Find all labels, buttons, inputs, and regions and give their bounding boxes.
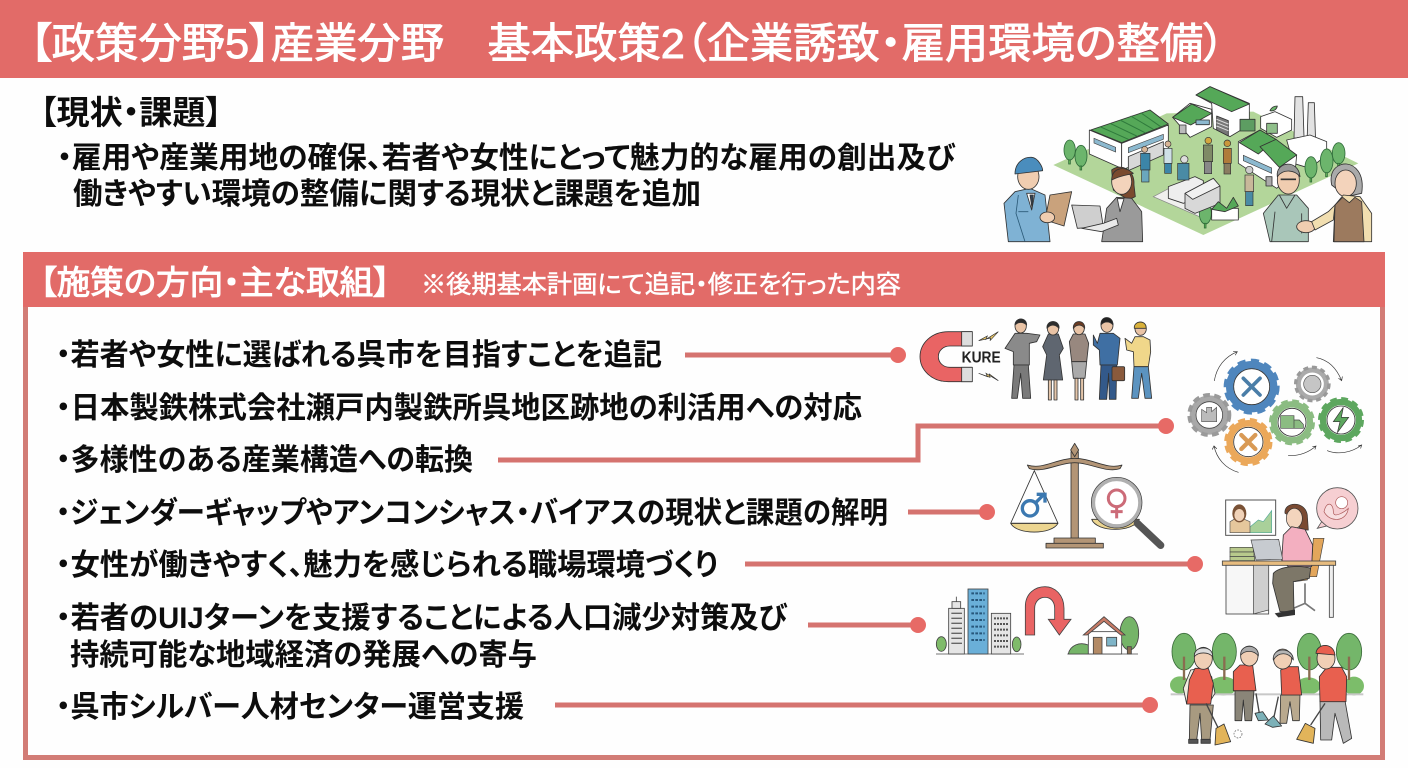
factory C with chimneys: [1238, 97, 1327, 188]
connector: item 7 to seniors: [555, 697, 1158, 713]
factory B: [1173, 87, 1255, 137]
title text: 【政策分野5】産業分野 基本政策2（企業誘致・雇用環境の整備）: [30, 20, 1225, 67]
list of initiatives: 持続可能な地域経済の発展への寄与: [70, 639, 537, 672]
speech bubble: [1317, 488, 1358, 529]
woman: [1285, 504, 1308, 530]
list of initiatives: [56, 339, 888, 724]
icon: interlocking gears: [1189, 352, 1362, 472]
older woman: [1312, 164, 1372, 242]
arrows around gears: [1212, 352, 1362, 472]
chair: [1295, 538, 1324, 582]
icon: seniors cleaning with brooms: [1170, 633, 1364, 745]
connector: item 6 to U-turn: [808, 617, 926, 633]
magnifier with female symbol: [1091, 477, 1161, 545]
orange gear tools: [1226, 420, 1270, 464]
senior 1: [1183, 647, 1231, 745]
crates and small sheds: [1168, 177, 1238, 220]
senior 4: [1297, 645, 1352, 743]
city buildings: [936, 589, 1021, 654]
bright green gear lightning: [1320, 399, 1362, 441]
connector: item 5 to office: [745, 556, 1203, 572]
connector: item 1 to magnet: [685, 347, 906, 363]
connector: item 3 to gears: [498, 418, 1174, 460]
text block: current state and issues: [57, 142, 956, 211]
books and laptop: [1230, 547, 1253, 552]
list of initiatives: ・日本製鉄株式会社瀬戸内製鉄所呉地区跡地の利活用への対応: [56, 392, 862, 425]
factory A: [1089, 110, 1168, 171]
male symbol: [1022, 494, 1045, 516]
icon: woman working at desk: [1222, 488, 1358, 617]
woman with laptop: [1072, 167, 1143, 242]
senior 3: [1265, 649, 1302, 727]
panel heading: 【施策の方向・主な取組】: [40, 264, 390, 301]
small gray gear: [1296, 367, 1329, 401]
illustration: industrial park and workers: [1004, 87, 1372, 242]
U-turn arrow: [1025, 587, 1071, 635]
list of initiatives: ・女性が働きやすく、魅力を感じられる職場環境づくり: [56, 548, 718, 582]
title banner: [0, 0, 1408, 78]
trees: [1172, 633, 1362, 670]
list of initiatives: ・多様性のある産業構造への転換: [56, 444, 473, 477]
panel: measures and main initiatives: [23, 252, 1385, 758]
icon: gender balance scales with magnifier: [1011, 443, 1161, 548]
panel note: ※後期基本計画にて追記・修正を行った内容: [421, 271, 901, 299]
trees in park: [1064, 140, 1345, 228]
house with trees: [1068, 617, 1139, 654]
gray gear factory: [1189, 395, 1229, 435]
text block: current state and issues: 働きやすい環境の整備に関する現状と課題を追加: [73, 178, 701, 211]
list of initiatives: ・ジェンダーギャップやアンコンシャス・バイアスの現状と課題の解明: [56, 496, 888, 530]
list of initiatives: ・呉市シルバー人材センター運営支援: [56, 691, 524, 724]
blue gear tools: [1226, 361, 1277, 412]
senior 2: [1233, 646, 1268, 721]
section heading: current state and issues: 【現状・課題】: [40, 94, 222, 131]
icon: KURE magnet and people: [920, 317, 1152, 400]
green gear truck: [1271, 401, 1313, 443]
small workers in park: [1141, 137, 1254, 206]
bushes and ground line: [1170, 676, 1364, 695]
panel header band: [23, 252, 1385, 307]
list of initiatives: ・若者や女性に選ばれる呉市を目指すことを追記: [56, 339, 662, 372]
list of initiatives: ・若者のUIJターンを支援することによる人口減少対策及び: [56, 602, 788, 635]
senior worker: [1263, 164, 1315, 242]
icon: from city back to hometown: [936, 587, 1139, 654]
group of five people: [1005, 317, 1152, 400]
text block: current state and issues: ・雇用や産業用地の確保、若者や女性にとって魅力的な雇用の創出及び: [57, 142, 956, 175]
connector: item 4 to scales: [908, 504, 995, 520]
label KURE: KURE: [962, 350, 1001, 367]
desk: [1222, 561, 1336, 565]
engineer with clipboard: [1004, 157, 1072, 242]
